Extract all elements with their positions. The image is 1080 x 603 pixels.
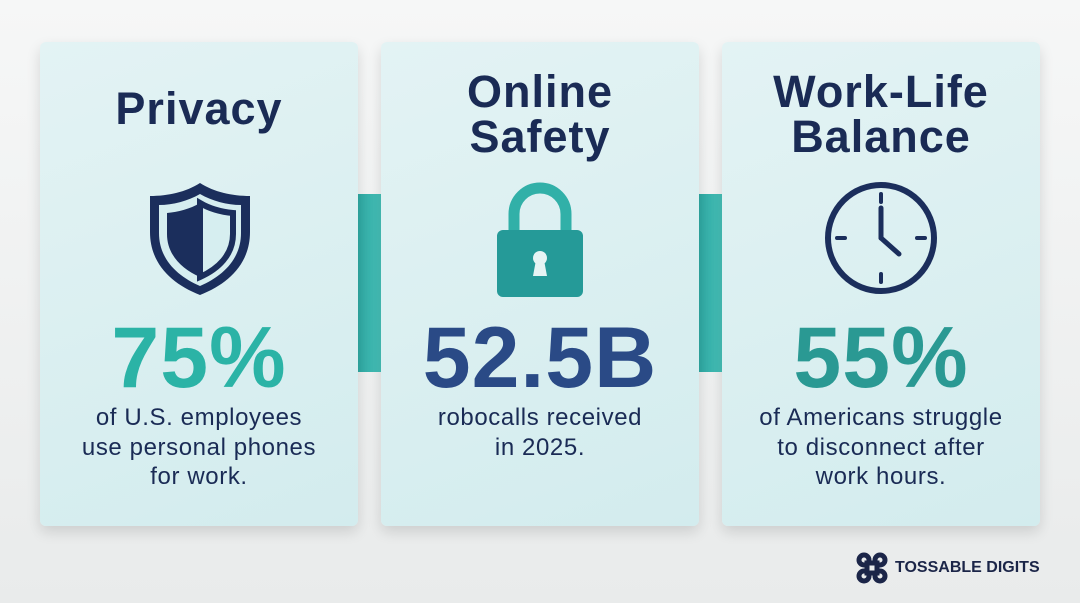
description: to disconnect after [777,434,985,460]
description: for work. [150,463,248,490]
heading: work-life balance: Work-Life [773,66,989,117]
description: of Americans struggle [759,404,1003,431]
heading: work-life balance [773,66,989,162]
connector: safety to balance [699,194,722,372]
connector: privacy to safety [358,194,381,372]
description: of U.S. employees [96,404,302,431]
description [438,404,642,460]
stat: 55%: 55% [793,310,969,406]
panel: work-life balance [722,42,1040,526]
stat: 75%: 75% [111,310,287,406]
panel: privacy [40,42,358,526]
heading: online safety: Online [467,66,613,117]
logo: tossable digits [856,552,1040,584]
heading: work-life balance: Balance [791,111,971,162]
description [759,404,1003,490]
icon: lock [497,182,583,297]
description: work hours. [816,463,946,490]
description [82,404,316,490]
icon: command symbol [856,552,888,584]
icon: shield [150,183,250,295]
heading: online safety [467,66,613,162]
stat: 52.5B: 52.5B [423,310,657,406]
panel: online safety [381,42,699,526]
description: robocalls received [438,404,642,431]
description: use personal phones [82,434,316,460]
icon: clock [825,182,937,294]
description: in 2025. [495,434,585,460]
logo: tossable digits: TOSSABLE DIGITS [895,559,1040,576]
heading: privacy: Privacy [115,83,283,134]
heading: online safety: Safety [469,111,611,162]
